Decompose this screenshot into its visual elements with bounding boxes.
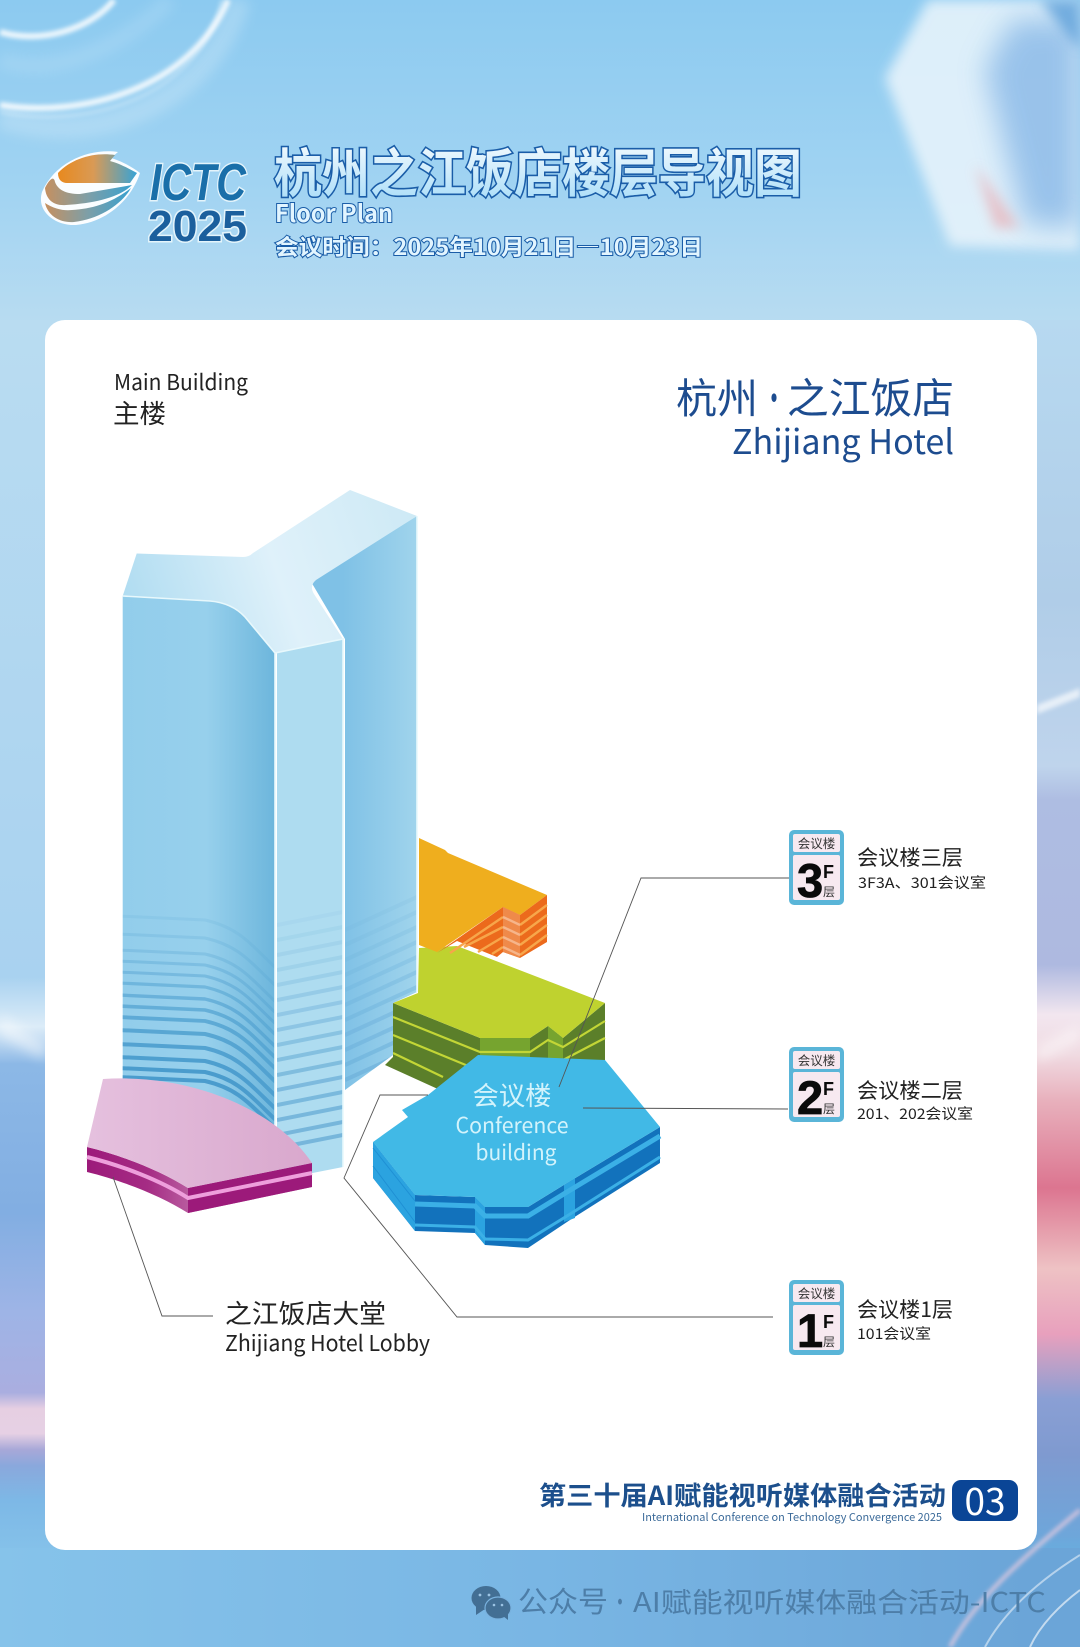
floor label: 1F: 会议楼1层	[857, 1294, 953, 1324]
building: lobby	[87, 1078, 312, 1213]
floor label: 2F	[857, 1075, 973, 1124]
floor badge: 2F: F	[823, 1079, 834, 1099]
label: lobby: Zhijiang Hotel Lobby	[225, 1326, 431, 1358]
floor badge: 3F	[789, 830, 844, 907]
conference building label: building	[476, 1136, 556, 1167]
label: lobby	[225, 1294, 431, 1358]
heading: hotel name: 之江饭店	[787, 365, 954, 425]
page number: 03	[964, 1472, 1006, 1526]
logo: ICTC 2025	[41, 151, 247, 251]
label: main building	[113, 365, 249, 431]
decoration: top-right crystal	[885, 0, 1080, 250]
building: main tower	[118, 490, 417, 1180]
floor badge: 3F: 3	[797, 854, 823, 907]
heading: hotel name: ·	[762, 365, 786, 425]
floor label: 1F	[857, 1294, 953, 1344]
building: conference building	[373, 1055, 660, 1248]
floor label: 3F	[857, 842, 986, 893]
meeting date: 会议时间：2025年10月21日—10月23日	[275, 230, 703, 262]
logo year 2025: 2025	[148, 202, 247, 251]
watermark text: ·	[611, 1581, 629, 1620]
floor badge: 1F: 1	[797, 1304, 823, 1357]
floor badge: 2F: 层	[823, 1100, 835, 1117]
floor badge: 3F: F	[823, 862, 834, 882]
label: main building: 主楼	[113, 394, 166, 431]
title: 杭州之江饭店楼层导视图	[274, 132, 802, 207]
logo mark	[41, 151, 140, 225]
watermark text	[518, 1579, 1046, 1621]
conference building label: 会议楼	[472, 1076, 552, 1113]
conference building label: Conference	[456, 1109, 568, 1140]
panel: white card	[45, 320, 1037, 1550]
conference building label	[456, 1076, 568, 1167]
floor badge: 1F: 层	[823, 1333, 835, 1350]
subtitle: floor plan: Floor Plan	[275, 194, 393, 229]
floor badge: 3F: 会议楼	[798, 833, 835, 852]
building: orange block	[419, 838, 547, 958]
label: main building: Main Building	[114, 365, 249, 397]
floor badge: 2F	[789, 1047, 844, 1124]
logo wordmark ICTC: ICTC	[150, 154, 247, 212]
heading: hotel name: 杭州	[676, 365, 758, 425]
floor label: 1F: 101会议室	[857, 1323, 931, 1344]
floor label: 3F: 3F3A、301会议室	[858, 872, 986, 893]
heading: hotel name	[676, 365, 954, 464]
decoration: bottom-right arcs	[950, 1510, 1080, 1647]
label: lobby: 之江饭店大堂	[225, 1294, 386, 1331]
leader lines	[113, 878, 791, 1317]
page number	[952, 1472, 1018, 1526]
floor badge: 1F	[789, 1280, 844, 1357]
tower roof	[123, 490, 417, 653]
footer: event name: International Conference on Technology Convergence 2025	[642, 1509, 942, 1525]
floor label: 2F: 会议楼二层	[857, 1075, 963, 1105]
floor badge: 1F: F	[823, 1312, 834, 1332]
floor label: 3F: 会议楼三层	[857, 842, 963, 872]
building: green block	[385, 946, 605, 1090]
watermark text: AI赋能视听媒体融合活动-ICTC	[633, 1580, 1046, 1620]
floor badge: 1F: 会议楼	[798, 1283, 835, 1302]
decoration: top-left light rings	[0, 0, 240, 128]
floor badge: 3F: 层	[823, 883, 835, 900]
floor label: 2F: 201、202会议室	[857, 1103, 973, 1124]
icon: wechat	[472, 1586, 511, 1620]
watermark text: 公众号	[518, 1579, 608, 1621]
footer: event name: 第三十届AI赋能视听媒体融合活动	[539, 1476, 946, 1513]
floor badge: 2F: 2	[797, 1071, 823, 1124]
floor badge: 2F: 会议楼	[798, 1050, 835, 1069]
heading: hotel name: Zhijiang Hotel	[732, 415, 954, 464]
tower right face	[310, 516, 417, 1090]
tower centre face	[277, 639, 343, 1180]
tower left face	[118, 596, 280, 1133]
